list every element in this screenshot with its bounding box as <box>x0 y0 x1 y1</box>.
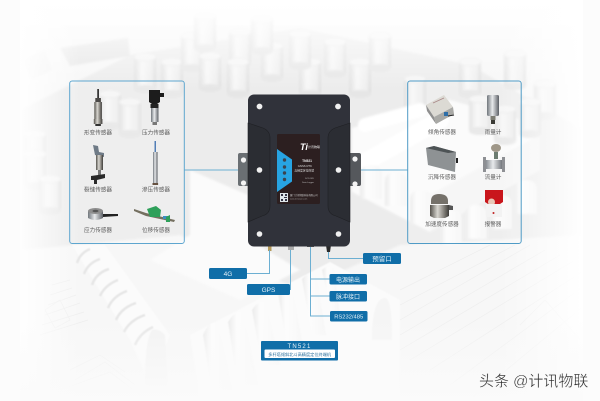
label: displacement sensor: 位移传感器 <box>142 226 170 234</box>
label: crack sensor: 裂缝传感器 <box>84 186 112 194</box>
sensor: acceleration <box>430 194 453 218</box>
logo name: 计讯物联 <box>308 144 320 149</box>
button: GPS <box>247 284 290 295</box>
watermark: 头条 @计讯物联 <box>479 373 588 390</box>
wire: reserved port <box>328 252 363 258</box>
button: RS232/485 <box>330 311 368 322</box>
sensor: strain <box>94 89 102 126</box>
button: 4G: 4G <box>224 271 232 278</box>
button: RS232/485: RS232/485 <box>334 314 363 320</box>
sensor: displacement <box>134 206 175 222</box>
label: acceleration sensor: 加速度传感器 <box>425 220 459 228</box>
sensor: inclination <box>426 95 454 124</box>
connector: device to right panel <box>358 169 408 171</box>
power text: DC9-36V <box>305 178 315 180</box>
button: pulse port <box>330 291 367 302</box>
wire: 4G <box>247 250 270 274</box>
label: inclination sensor: 倾角传感器 <box>428 128 456 136</box>
mounting holes <box>257 104 341 237</box>
label: osmotic pressure sensor: 渗压传感器 <box>142 186 170 194</box>
company text: 厦门计讯物联科技有限公司 <box>290 193 318 197</box>
button: power output <box>330 274 367 284</box>
connector: antenna <box>268 244 331 252</box>
title: TN521: TN521 <box>287 344 312 350</box>
LED indicators <box>283 158 286 181</box>
subtitle: 多杆塔倾斜北斗高精度定位终端机 <box>268 351 332 358</box>
mounting bracket left <box>238 153 249 186</box>
subtitle strip <box>264 350 335 358</box>
spec text: GNSS RTK <box>298 164 312 168</box>
label: rain gauge: 雨量计 <box>485 128 502 136</box>
sensor: alarm <box>485 190 503 217</box>
model text: TN521 <box>302 159 312 163</box>
label: flow meter: 流量计 <box>485 173 502 181</box>
button: reserved port: 预留口 <box>372 254 392 263</box>
QR code <box>280 193 288 202</box>
sensor: crack <box>91 145 105 184</box>
label plate <box>277 134 320 204</box>
sensor: osmotic pressure <box>152 141 158 185</box>
website text: www.tenwave.com <box>290 198 307 200</box>
wire: power, pulse, RS232 <box>310 247 330 316</box>
label: strain sensor: 形变传感器 <box>84 128 112 136</box>
wire: GPS <box>289 250 290 290</box>
label: pressure sensor: 压力传感器 <box>142 128 170 136</box>
standard text: Data Logger <box>302 181 314 184</box>
button: reserved port <box>363 253 401 264</box>
sensor: stress <box>88 208 118 220</box>
LED strip <box>277 149 292 192</box>
label: stress sensor: 应力传感器 <box>84 226 112 234</box>
mounting bracket right <box>349 153 361 187</box>
product title box <box>261 341 338 360</box>
connector: left panel to device <box>184 169 240 171</box>
button: 4G <box>209 268 247 279</box>
side panel left <box>248 123 270 222</box>
sensor: rain gauge <box>487 95 499 124</box>
label: settlement sensor: 沉降传感器 <box>428 173 456 181</box>
button: power output: 电源输出 <box>336 276 360 284</box>
panel: right sensors <box>408 81 521 244</box>
sensor: flow meter <box>483 144 505 172</box>
description text: 高精度定位终端 <box>294 168 314 172</box>
button: pulse port: 脉冲接口 <box>336 293 360 301</box>
sensor: pressure <box>149 90 164 125</box>
button: GPS: GPS <box>262 287 276 294</box>
label: alarm: 报警器 <box>485 220 502 228</box>
side panel right <box>328 123 350 222</box>
device: TN521 data logger <box>238 94 361 252</box>
logo: Ti <box>300 142 308 152</box>
panel: left sensors <box>70 81 184 244</box>
device body <box>248 94 350 246</box>
sensor: settlement <box>426 146 458 172</box>
